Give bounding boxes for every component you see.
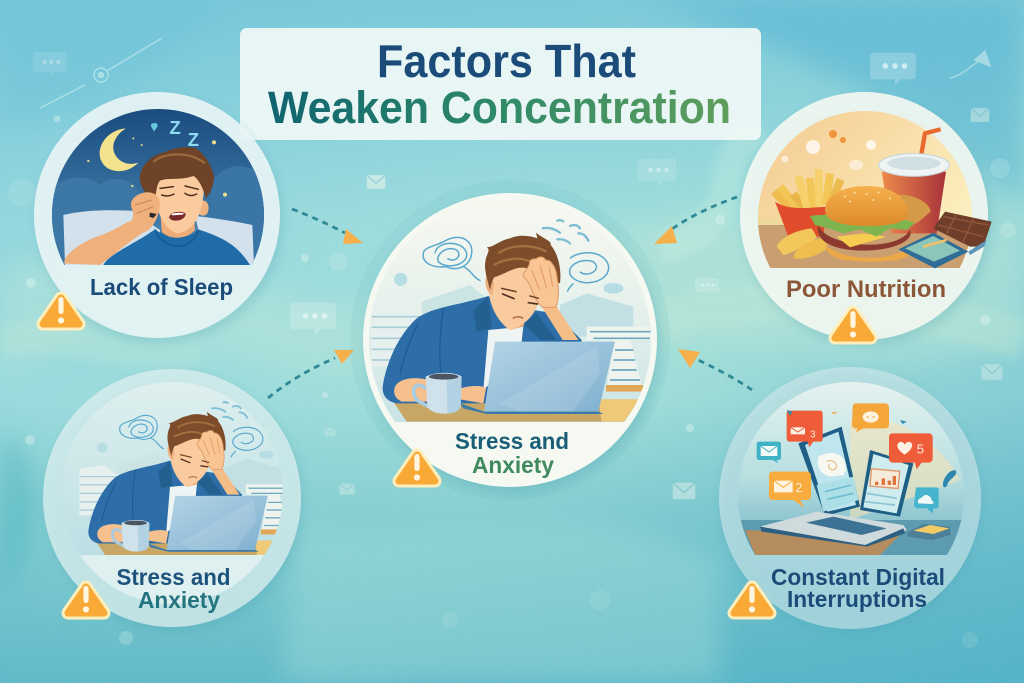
panel: stress and anxiety left bbox=[43, 369, 304, 632]
warning icon bbox=[68, 586, 104, 613]
zzz text: Z bbox=[188, 129, 199, 150]
illustration: stressed student at laptop bbox=[369, 219, 651, 422]
illustration: stressed student at laptop bbox=[66, 382, 283, 604]
illustration: fast food bbox=[750, 105, 992, 268]
zzz text bbox=[170, 121, 198, 146]
title panel bbox=[240, 28, 761, 140]
label: poor nutrition: Poor Nutrition bbox=[786, 276, 946, 303]
arrow: stress to center bbox=[268, 350, 354, 398]
label: constant digital: Constant Digital bbox=[771, 564, 945, 590]
warning icon bbox=[734, 586, 770, 613]
badge count 3: 3 bbox=[810, 429, 816, 440]
label: stress and: Stress and bbox=[455, 428, 569, 454]
illustration: laptop and notifications bbox=[730, 380, 970, 555]
warning icon bbox=[43, 297, 79, 324]
label: stress and: Stress and bbox=[116, 564, 230, 590]
zzz text: Z bbox=[169, 117, 181, 138]
arrow: poor nutrition to center bbox=[654, 197, 737, 244]
label: interruptions: Interruptions bbox=[787, 586, 927, 612]
arrow: digital interruptions to center bbox=[678, 349, 752, 390]
arrow: lack of sleep to center bbox=[292, 209, 363, 244]
label: anxiety: Anxiety bbox=[138, 587, 220, 613]
panel: poor nutrition bbox=[740, 92, 992, 346]
warning icon bbox=[399, 454, 435, 481]
panel: constant digital interruptions bbox=[719, 367, 982, 633]
illustration: student yawning at night bbox=[50, 107, 267, 267]
title line one: Factors That bbox=[377, 35, 636, 87]
panel: lack of sleep bbox=[34, 92, 283, 344]
badge count 5: 5 bbox=[917, 442, 924, 457]
badge count 2: 2 bbox=[795, 481, 802, 495]
warning icon bbox=[835, 311, 871, 338]
panel: stress and anxiety center bbox=[350, 180, 670, 500]
label: lack of sleep: Lack of Sleep bbox=[90, 274, 233, 300]
title line two: Weaken Concentration bbox=[268, 82, 731, 133]
label: anxiety: Anxiety bbox=[472, 452, 554, 478]
